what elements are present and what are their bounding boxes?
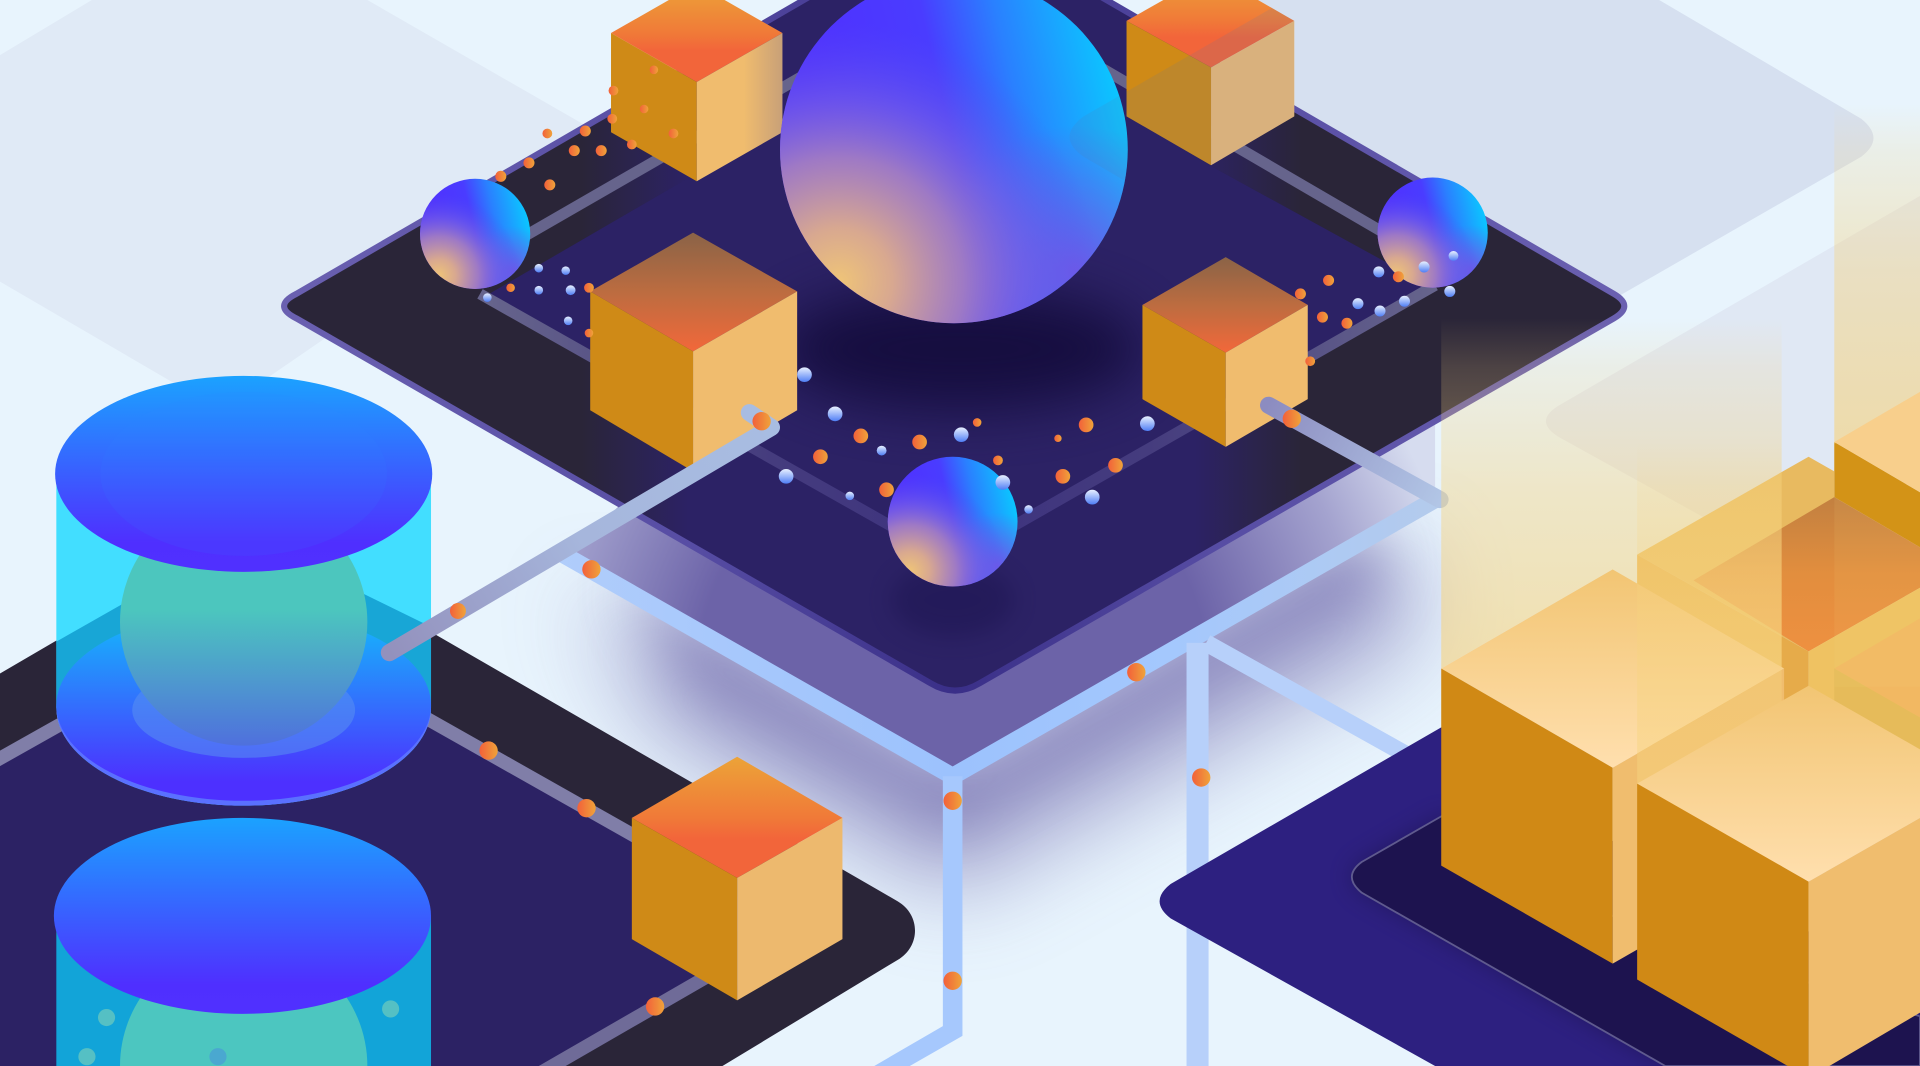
pipes: light blue network <box>557 500 1435 1066</box>
pipe: right connector <box>1269 405 1440 500</box>
lower left platform <box>0 624 915 1066</box>
sphere: bottom <box>888 457 1018 587</box>
apron between platform and pipes <box>566 306 1435 776</box>
cube: lower left <box>632 757 842 1000</box>
cube: big front <box>1637 686 1920 1066</box>
neighbouring cube behind <box>1834 618 1920 718</box>
inner tray glow <box>1352 814 1920 1066</box>
cylinder: upper <box>55 376 432 806</box>
platform wide shadow glow <box>576 539 1420 894</box>
inner purple field <box>485 24 1433 561</box>
sphere: left <box>420 179 530 289</box>
shadow under bottom sphere <box>891 563 1014 637</box>
light beam: right <box>1834 104 1920 687</box>
light beam: centre <box>1637 442 1782 785</box>
light beam: left <box>1441 318 1782 669</box>
cylinder: lower <box>54 818 431 1066</box>
platform outer shadow glow <box>624 527 1384 833</box>
purple field <box>0 624 747 1066</box>
cube: back right top <box>1834 392 1920 492</box>
blue data dots on main platform <box>483 251 1458 514</box>
translucent hexagon overlay on sphere and cube <box>1070 8 1294 180</box>
cube: back right partial <box>1834 442 1920 547</box>
inner tray <box>1352 814 1920 1066</box>
main sphere <box>780 0 1128 323</box>
orange data dots on main platform <box>495 66 1404 497</box>
lower right platform <box>1160 727 1920 1066</box>
cube: top right <box>1127 0 1294 165</box>
cube: centre right <box>1142 257 1308 447</box>
cube: top left <box>611 0 782 181</box>
cube: back centre <box>1637 457 1920 857</box>
orange dots on pipes <box>450 410 1301 1016</box>
shadow under main sphere <box>776 288 1144 410</box>
pipe: left connector <box>389 413 771 653</box>
tracks on lower left platform <box>0 710 722 1066</box>
main platform <box>284 0 1624 691</box>
tracks on main platform <box>480 59 1435 561</box>
cube: big left <box>1441 569 1784 964</box>
sphere: right <box>1378 178 1488 288</box>
cube: centre left <box>590 233 797 471</box>
background hexagons <box>0 0 1920 649</box>
